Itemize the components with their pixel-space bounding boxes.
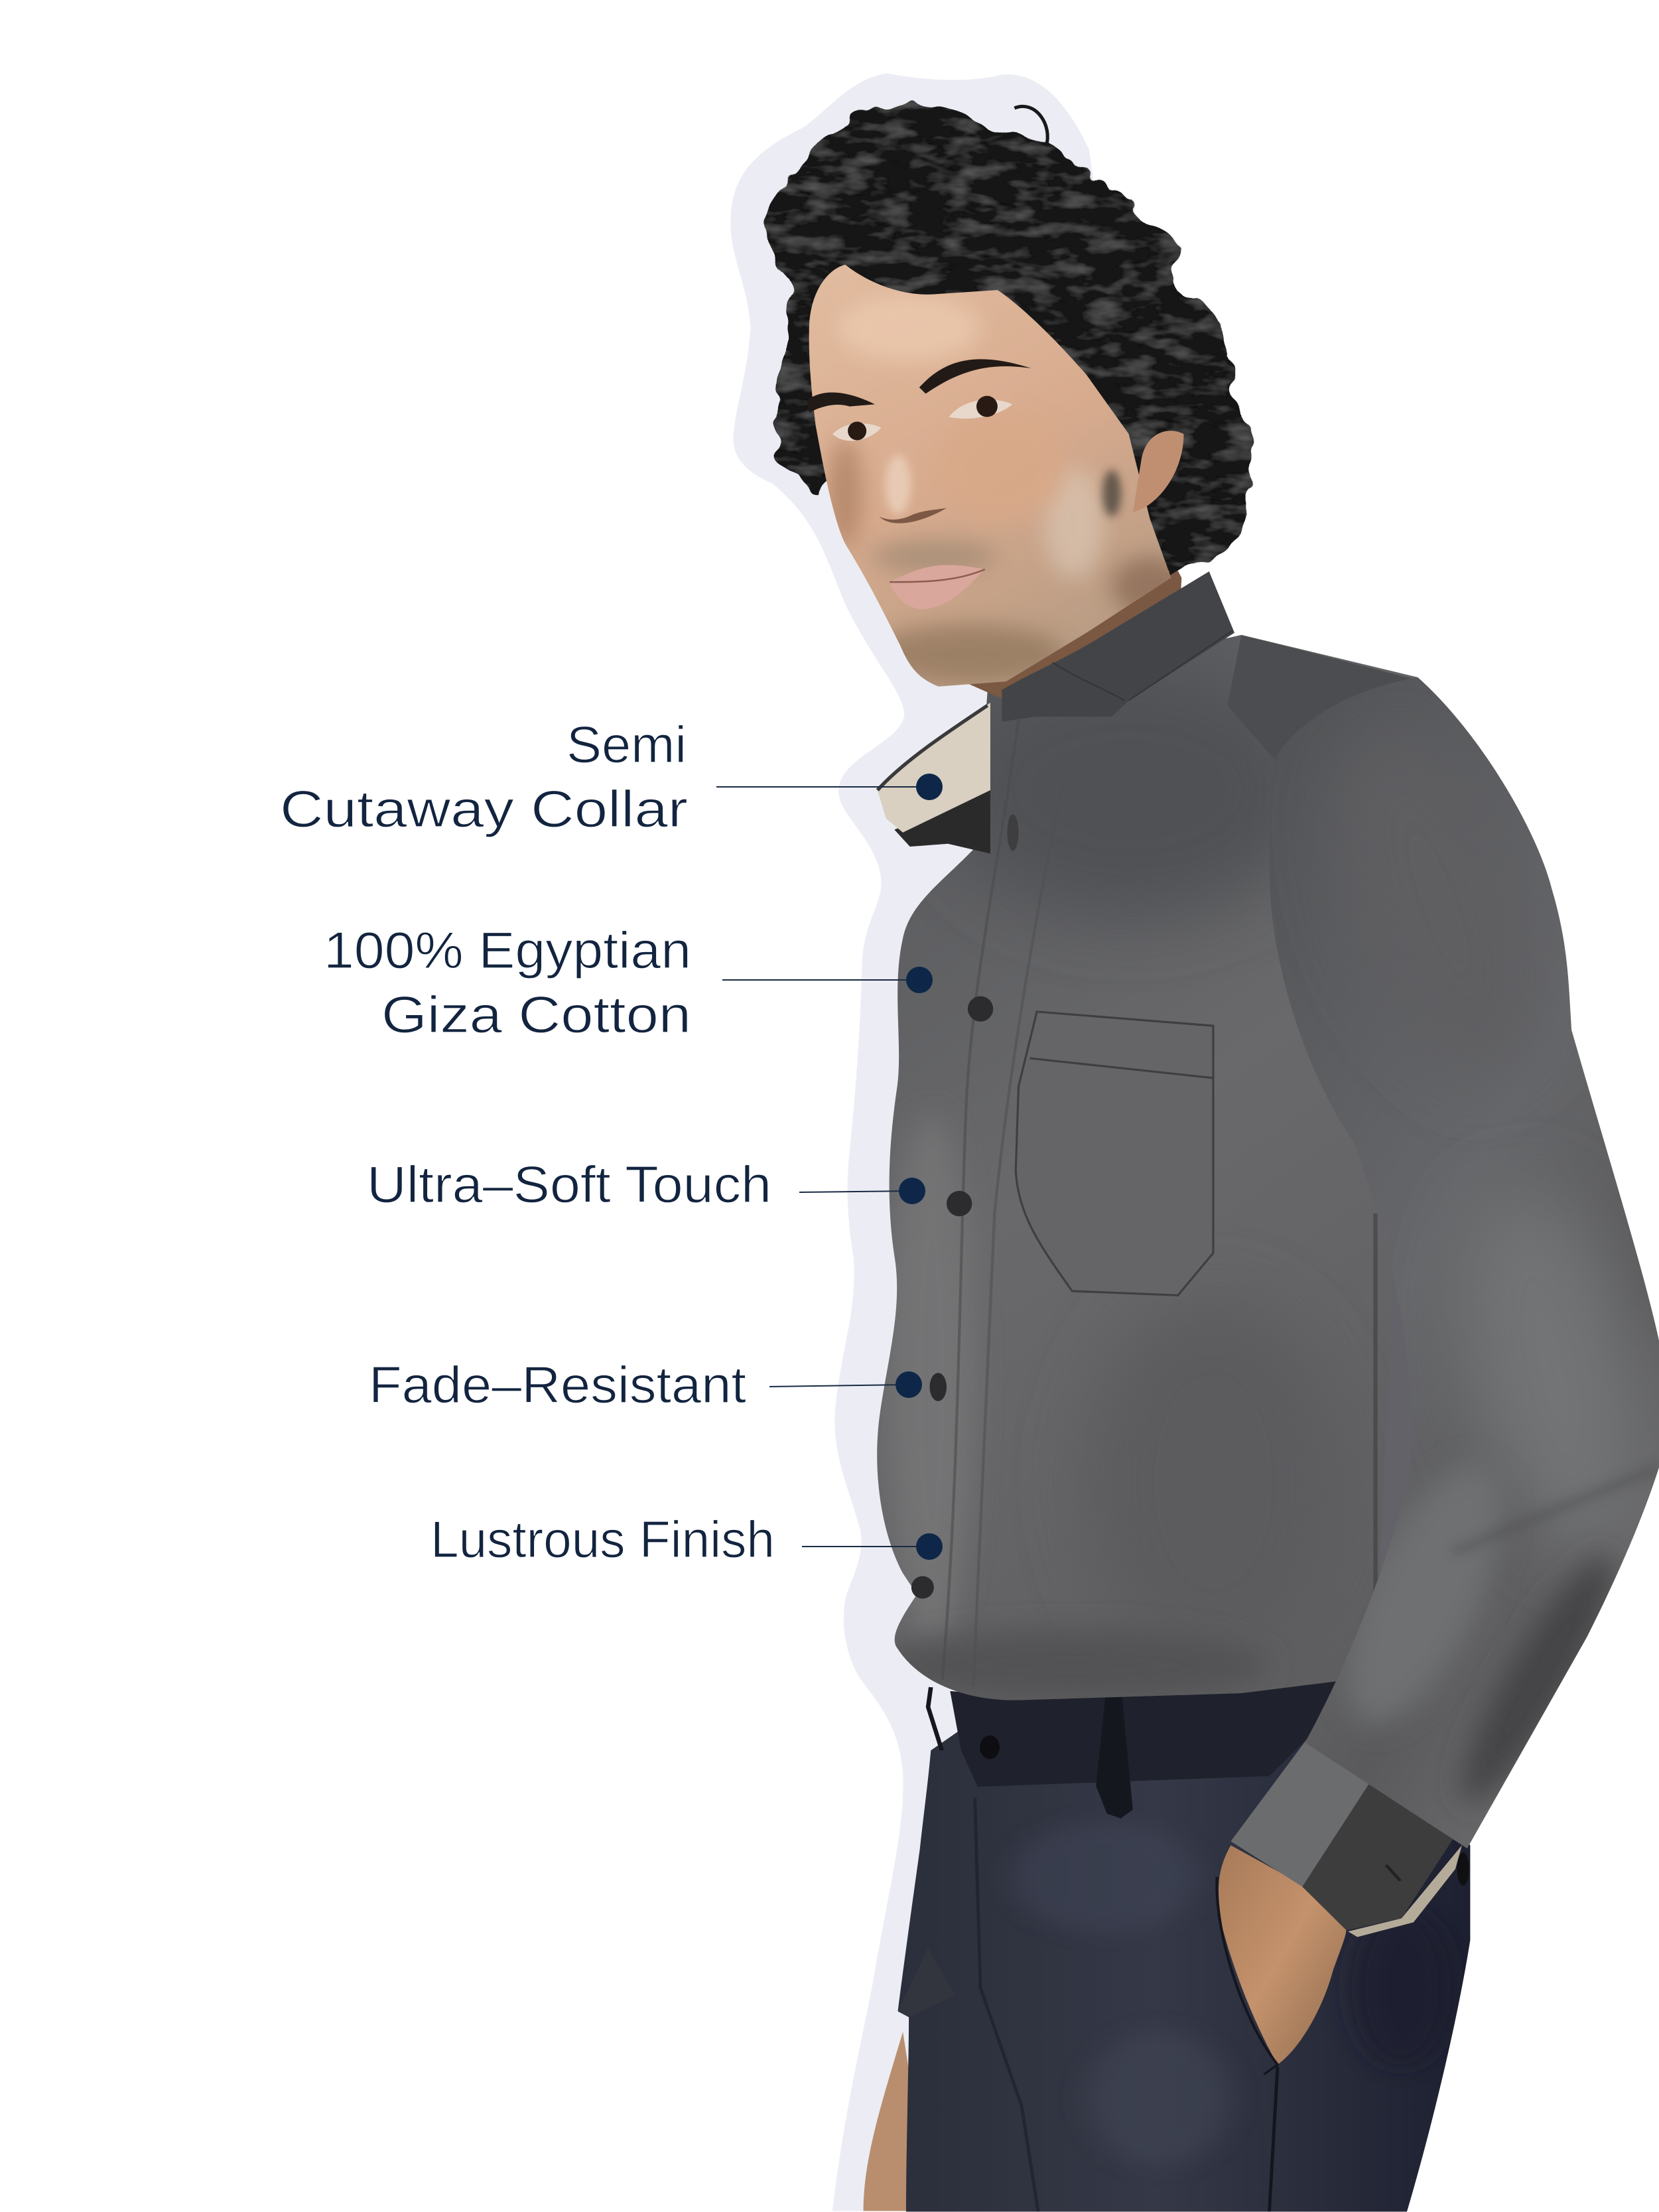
shirt cuff dark section — [1302, 1766, 1459, 1930]
torso shading — [875, 635, 1461, 1700]
cuff button — [1457, 1852, 1469, 1886]
leader line — [716, 786, 929, 788]
eyes — [832, 423, 881, 441]
collar wing — [1002, 571, 1234, 722]
sleeve highlights — [1345, 812, 1659, 1807]
hand in pocket — [1219, 1845, 1347, 2065]
callout: Semi Cutaway Collar — [280, 715, 943, 838]
cuff inner lining — [1348, 1845, 1462, 1937]
label: Semi — [566, 715, 687, 774]
callout: Fade-Resistant — [369, 1355, 922, 1414]
eyebrows — [807, 392, 875, 413]
face shading — [829, 295, 1188, 683]
head — [767, 104, 1253, 722]
waistband — [950, 1659, 1347, 1787]
leader line — [722, 979, 919, 981]
callout: Semi Cutaway Collar: Cutaway Collar — [280, 780, 688, 838]
sleeve — [1270, 677, 1659, 1848]
shirt cuff light section — [1230, 1727, 1380, 1887]
marker dot — [906, 967, 933, 993]
label: Ultra–Soft Touch — [367, 1155, 771, 1213]
trousers — [897, 1659, 1470, 2211]
face — [803, 256, 1183, 696]
model figure — [767, 104, 1659, 2211]
cream collar band — [878, 703, 990, 833]
ear — [1133, 431, 1183, 512]
trouser highlights — [897, 1798, 1451, 2211]
inner collar lining — [878, 703, 990, 854]
callout: Lustrous Finish — [431, 1510, 943, 1568]
background blob behind model — [730, 74, 1128, 2211]
shirt torso — [846, 621, 1659, 1877]
callout: Ultra-Soft Touch — [367, 1155, 925, 1213]
marker dot — [916, 1533, 943, 1560]
marker dot — [899, 1178, 925, 1204]
hair — [767, 104, 1253, 576]
label: Fade–Resistant — [369, 1355, 746, 1414]
lips — [890, 565, 985, 610]
waist button — [980, 1736, 1000, 1759]
flyaway curl — [1014, 106, 1047, 146]
shirt buttons — [911, 814, 1018, 1599]
chest pocket — [1016, 1012, 1213, 1295]
marker dot — [916, 774, 943, 800]
leader line — [769, 1385, 909, 1387]
pocket edge — [1217, 1877, 1278, 2075]
label: Lustrous Finish — [431, 1510, 775, 1568]
callout: 100% Egyptian Giza Cotton: Giza Cotton — [381, 985, 691, 1044]
pocket flap hem — [1029, 1058, 1213, 1078]
belt loops — [1096, 1694, 1133, 1819]
leader line — [802, 1546, 929, 1547]
nose — [879, 508, 947, 523]
label: 100% Egyptian — [324, 921, 691, 979]
marker dot — [896, 1371, 922, 1398]
neck — [968, 502, 1181, 701]
leader line — [799, 1191, 912, 1192]
collar stitching — [1053, 631, 1232, 701]
callout: 100% Egyptian Giza Cotton — [324, 921, 933, 1044]
bare leg below left — [864, 2032, 931, 2211]
buttonhole — [1386, 1865, 1400, 1881]
